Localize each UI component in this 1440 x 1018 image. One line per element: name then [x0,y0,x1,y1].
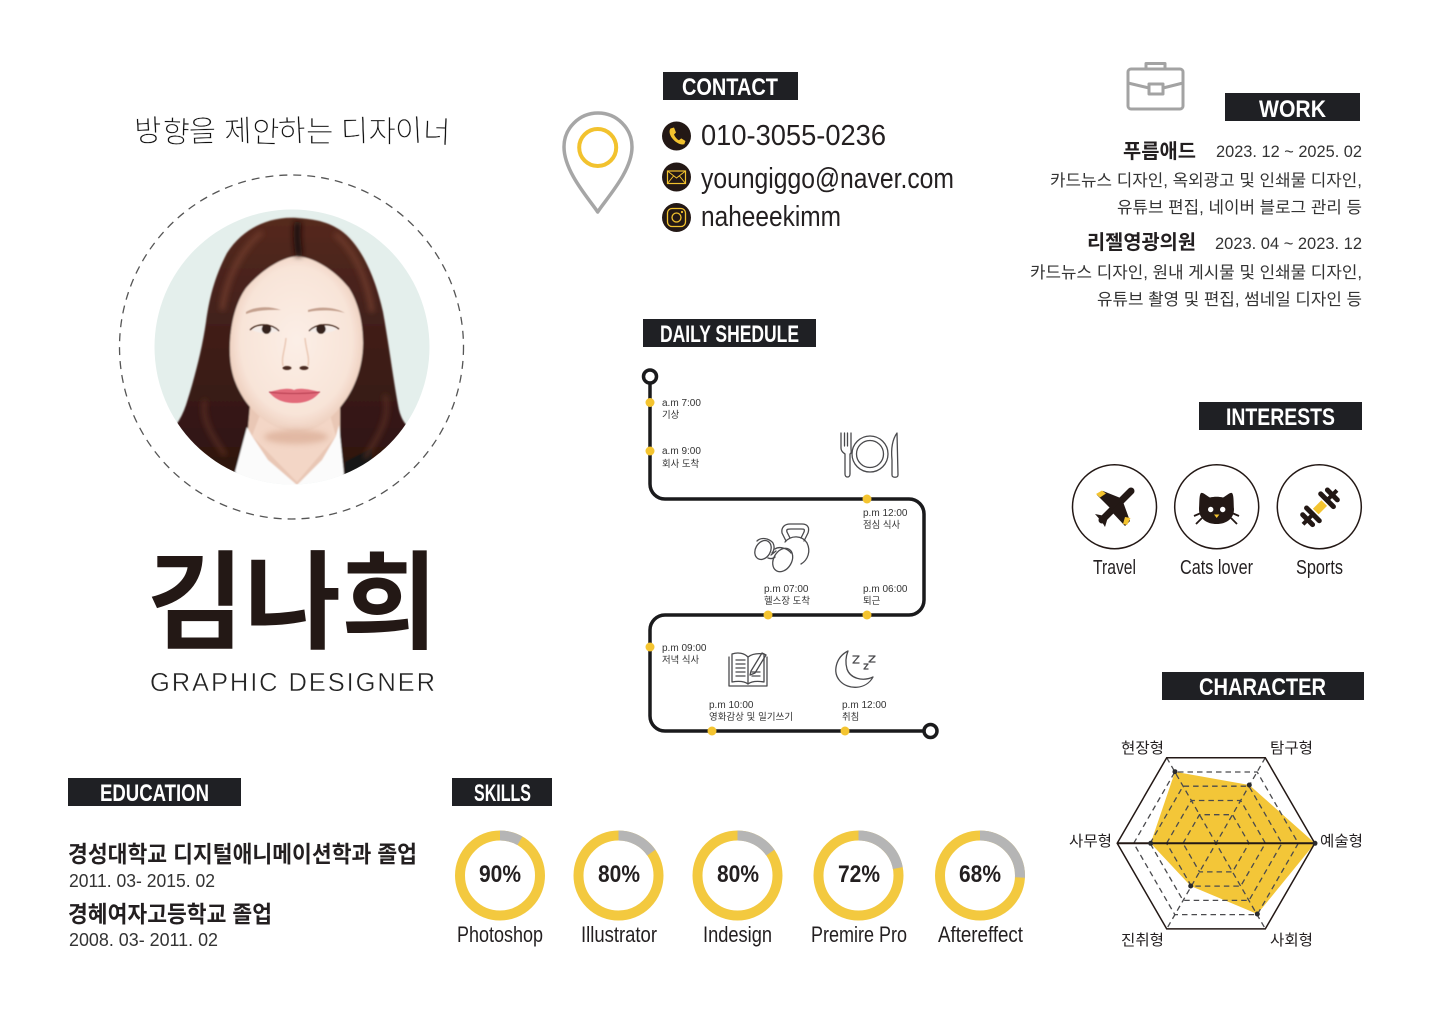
radar labels: 탐구형 [1270,740,1313,757]
skill: premiere pro [811,836,907,947]
radar labels: 진취형 [1121,932,1164,949]
job 1 description: 카드뉴스 디자인, 옥외광고 및 인쇄물 디자인, [1050,171,1362,190]
radar labels [1069,740,1363,949]
school 1 dates: 2011. 03- 2015. 02 [69,871,215,891]
job 1 description [1050,171,1362,217]
panel: education [68,778,417,950]
stop labels: p.m 06:00 [863,584,908,595]
skill: after effects [938,836,1023,947]
heading: skills: SKILLS [474,780,531,807]
heading: skills [452,778,552,807]
name: 김나희 [147,543,438,663]
email: youngiggo@naver.com [701,163,954,195]
icon: location pin [564,113,632,212]
job 2 description [1030,263,1362,309]
skill: photoshop [457,836,543,947]
stop labels: p.m 12:00 [842,700,887,711]
skill: illustrator: 80% [598,861,640,888]
job 1 description: 유튜브 편집, 네이버 블로그 관리 등 [1117,198,1362,217]
stop labels: p.m 09:00 [662,643,707,654]
panel: work [1030,64,1362,309]
interest: cats [1175,465,1259,579]
icon: briefcase [1128,64,1183,109]
hair part and waves [204,222,387,458]
stop labels: 영화감상 및 일기쓰기 [709,711,793,722]
stop labels: a.m 7:00 [662,398,701,409]
portrait photo [150,205,435,495]
stop labels: p.m 10:00 [709,700,754,711]
job 1 title: 푸름애드 [1123,140,1196,163]
skill: photoshop: Photoshop [457,922,543,947]
stop labels: 취침 [842,711,859,722]
heading: interests: INTERESTS [1226,404,1335,431]
heading: work [1225,93,1360,123]
panel: interests [1072,402,1362,579]
school 1: 경성대학교 디지털애니메이션학과 졸업 [68,841,417,867]
heading: education: EDUCATION [100,780,209,807]
timeline end node [924,724,937,738]
skill: after effects: Aftereffect [938,922,1023,947]
job 2 title: 리젤영광의원 [1087,231,1196,254]
job 2 description: 유튜브 촬영 및 편집, 썸네일 디자인 등 [1097,290,1362,309]
icon: instagram [662,203,691,232]
interest: travel [1072,465,1156,579]
skill: illustrator [578,836,658,947]
icon: plate and cutlery [841,433,898,477]
neck shadow [264,430,328,444]
panel: contact [564,72,954,233]
icon: moon and zzz [836,651,875,687]
stop labels: 저녁 식사 [662,654,699,665]
heading: character: CHARACTER [1199,674,1326,701]
phone number: 010-3055-0236 [701,120,886,152]
stop labels: 기상 [662,409,680,420]
interest: cats: Cats lover [1180,557,1253,579]
stop labels: 퇴근 [863,595,881,606]
interest: travel: Travel [1093,557,1136,579]
skill: indesign: Indesign [703,922,772,947]
stop labels: a.m 9:00 [662,446,701,457]
job title: GRAPHIC DESIGNER [150,669,435,697]
interest: sports: Sports [1296,557,1343,579]
stop labels: 회사 도착 [662,458,699,469]
job 2 description: 카드뉴스 디자인, 원내 게시물 및 인쇄물 디자인, [1030,263,1362,282]
heading: daily schedule: DAILY SHEDULE [660,321,799,348]
timeline start node [644,370,656,383]
stop labels: 헬스장 도착 [764,595,810,606]
stop labels [662,398,908,722]
radar labels: 예술형 [1320,833,1363,850]
skill: after effects: 68% [959,861,1001,888]
tagline: 방향을 제안하는 디자이너 [134,115,451,150]
resume infographic [68,62,1364,947]
skill: indesign: 80% [717,861,759,888]
radar chart [1117,758,1318,929]
radar labels: 사회형 [1270,932,1313,949]
radar labels: 현장형 [1121,740,1164,757]
timeline stops [646,398,872,736]
job 2 dates: 2023. 04 ~ 2023. 12 [1215,235,1362,253]
instagram handle: naheeekimm [701,201,841,233]
icon: mail [662,162,691,192]
skill: illustrator: Illustrator [581,922,657,947]
stop labels: p.m 12:00 [863,508,908,519]
heading: work: WORK [1259,96,1327,123]
job 1 dates: 2023. 12 ~ 2025. 02 [1216,143,1362,161]
heading: contact: CONTACT [682,74,778,101]
panel: character [1069,672,1364,949]
dashed circle around portrait [120,175,464,519]
interest: sports [1277,465,1361,579]
icon: phone [662,122,691,150]
icon: kettlebell and dumbbell [752,524,809,575]
icon: open book and pen [729,653,767,686]
radar labels: 사무형 [1069,833,1112,850]
skill: premiere pro: Premire Pro [811,922,907,947]
school 2: 경혜여자고등학교 졸업 [68,901,272,927]
timeline path [650,383,924,731]
panel: daily schedule [643,319,937,738]
skill: premiere pro: 72% [838,861,880,888]
skill: photoshop: 90% [479,861,521,888]
school 2 dates: 2008. 03- 2011. 02 [69,930,218,950]
stop labels: p.m 07:00 [764,584,809,595]
stop labels: 점심 식사 [863,519,900,530]
panel: skills [452,778,1023,947]
skill: indesign [698,836,778,947]
